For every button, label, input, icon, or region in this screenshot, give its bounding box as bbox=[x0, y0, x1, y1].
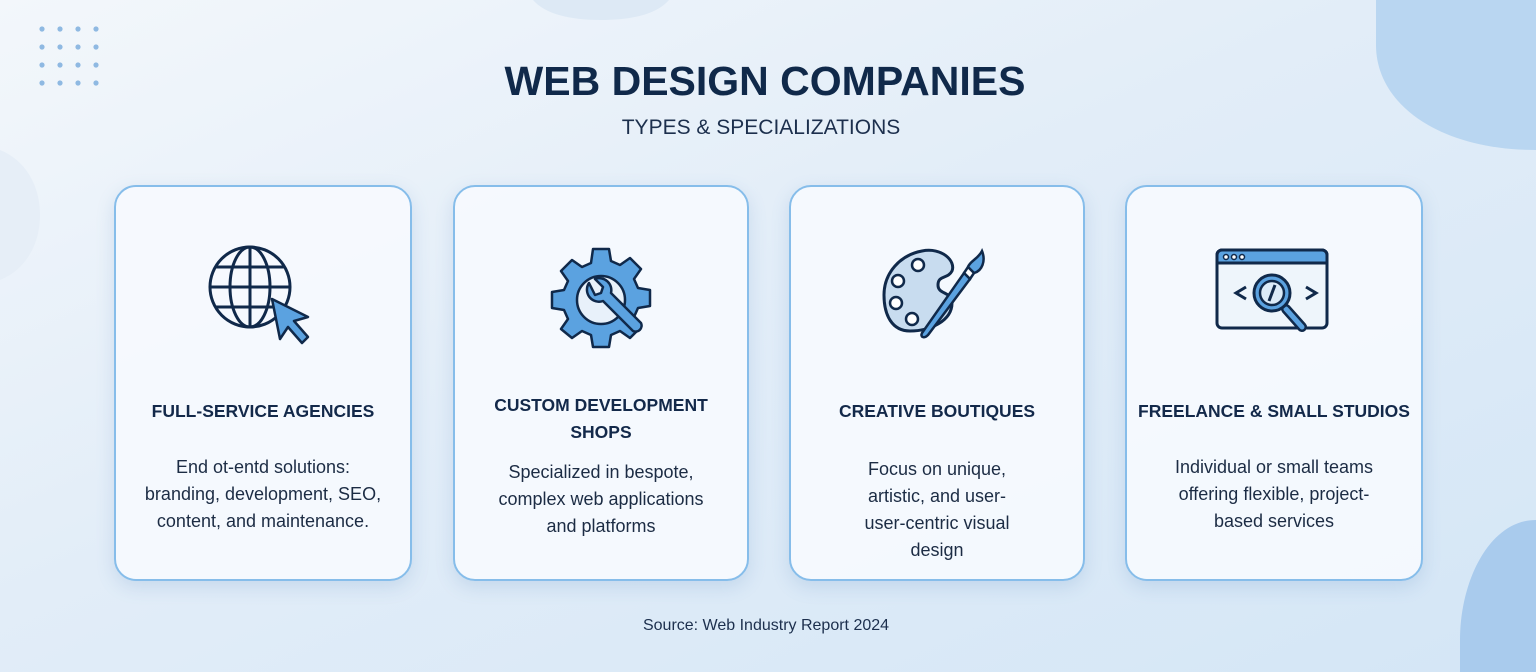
description: content, and maintenance. bbox=[157, 511, 369, 531]
icon: browser with magnifier bbox=[1216, 248, 1328, 332]
heading bbox=[494, 395, 708, 442]
panel: creative boutiques bbox=[789, 185, 1085, 581]
title: WEB DESIGN COMPANIES bbox=[505, 58, 1025, 104]
description: Specialized in bespote, bbox=[508, 462, 694, 482]
description: offering flexible, project- bbox=[1179, 484, 1369, 504]
heading: CREATIVE BOUTIQUES bbox=[839, 401, 1035, 421]
heading: CUSTOM DEVELOPMENT bbox=[494, 395, 708, 415]
icon: palette and brush bbox=[882, 248, 985, 338]
description: Individual or small teams bbox=[1175, 457, 1373, 477]
description bbox=[864, 459, 1010, 560]
description: Focus on unique, bbox=[868, 459, 1006, 479]
description: based services bbox=[1214, 511, 1334, 531]
description: End ot-entd solutions: bbox=[176, 457, 350, 477]
description: design bbox=[910, 540, 964, 560]
icon: globe with cursor bbox=[208, 246, 310, 344]
description bbox=[498, 462, 704, 536]
heading: SHOPS bbox=[570, 422, 632, 442]
panel: custom development shops bbox=[453, 185, 749, 581]
subtitle: TYPES & SPECIALIZATIONS bbox=[622, 116, 900, 139]
panel: freelance & small studios bbox=[1125, 185, 1423, 581]
description: artistic, and user- bbox=[868, 486, 1006, 506]
description bbox=[145, 457, 381, 531]
source note: Source: Web Industry Report 2024 bbox=[643, 617, 889, 634]
description: complex web applications bbox=[498, 489, 704, 509]
panel: full-service agencies bbox=[114, 185, 412, 581]
description: branding, development, SEO, bbox=[145, 484, 381, 504]
heading: FULL-SERVICE AGENCIES bbox=[152, 401, 374, 421]
description bbox=[1175, 457, 1373, 531]
icon: gear with wrench bbox=[550, 248, 652, 348]
heading: FREELANCE & SMALL STUDIOS bbox=[1138, 401, 1410, 421]
description: and platforms bbox=[546, 516, 656, 536]
description: user-centric visual bbox=[864, 513, 1010, 533]
